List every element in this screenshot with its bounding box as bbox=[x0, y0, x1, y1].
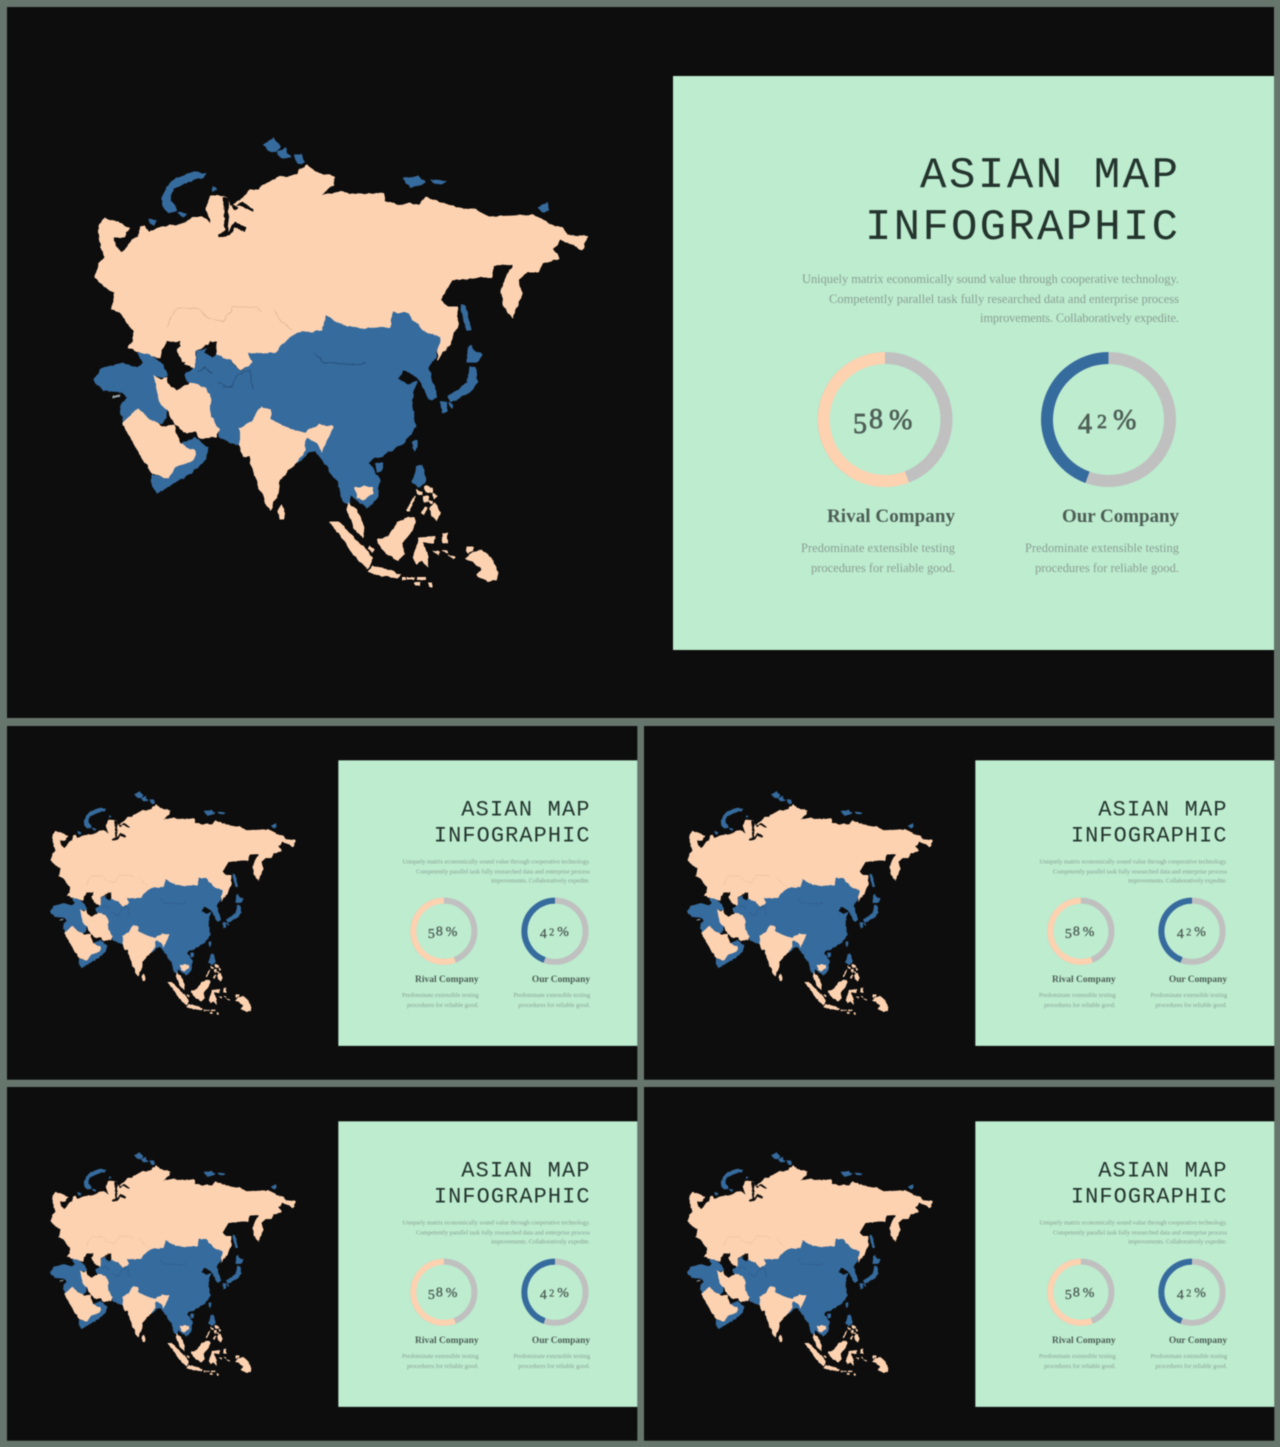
donut: rival 58% bbox=[824, 358, 946, 481]
slide: main large bbox=[7, 7, 1274, 718]
title: ASIAN MAP bbox=[1098, 798, 1227, 823]
slide: bottom right bbox=[644, 1087, 1274, 1441]
our value: 4 bbox=[1078, 409, 1092, 440]
map of Asia bbox=[51, 1153, 296, 1375]
rival caption: procedures for reliable good. bbox=[407, 1363, 479, 1370]
our caption: Predominate extensible testing bbox=[1150, 1353, 1227, 1360]
donut: our 42% bbox=[524, 1262, 586, 1323]
our value: % bbox=[1194, 1286, 1206, 1301]
our value: 2 bbox=[1097, 411, 1107, 433]
our caption: procedures for reliable good. bbox=[518, 1002, 591, 1009]
rival value: % bbox=[1083, 925, 1095, 940]
rival value: 5 bbox=[428, 927, 435, 942]
description bbox=[1040, 1219, 1228, 1246]
rival value: 5 bbox=[428, 1288, 435, 1303]
rival caption bbox=[402, 1353, 479, 1370]
panel: info bbox=[673, 76, 1274, 650]
description: Competently parallel task fully researched data and enterprise process bbox=[829, 292, 1179, 306]
panel: info bbox=[338, 1121, 637, 1407]
rival value: 8 bbox=[1073, 1285, 1080, 1300]
description: improvements. Collaboratively expedite. bbox=[1128, 1239, 1228, 1246]
title bbox=[434, 798, 590, 848]
rival caption: Predominate extensible testing bbox=[1039, 992, 1116, 999]
rival value: 8 bbox=[436, 1285, 443, 1300]
description: Uniquely matrix economically sound value through cooperative technology. bbox=[1040, 858, 1228, 865]
map of Asia bbox=[51, 792, 296, 1014]
slide background bbox=[7, 7, 1274, 718]
our heading: Our Company bbox=[1169, 1336, 1227, 1346]
our heading: Our Company bbox=[532, 1336, 590, 1346]
rival value: % bbox=[1083, 1286, 1095, 1301]
description: Competently parallel task fully researched data and enterprise process bbox=[416, 1229, 591, 1236]
our caption bbox=[513, 1353, 591, 1370]
title: INFOGRAPHIC bbox=[434, 823, 590, 848]
description: improvements. Collaboratively expedite. bbox=[491, 1239, 591, 1246]
title: ASIAN MAP bbox=[461, 798, 590, 823]
rival caption bbox=[801, 541, 956, 575]
donut: rival 58% bbox=[1050, 901, 1111, 962]
rival value: 8 bbox=[1073, 924, 1080, 939]
rival heading: Rival Company bbox=[1052, 975, 1116, 985]
donut: rival 58% bbox=[413, 901, 474, 962]
our value: % bbox=[557, 1286, 569, 1301]
our value: % bbox=[557, 925, 569, 940]
map of Asia bbox=[688, 1153, 933, 1375]
title: INFOGRAPHIC bbox=[1071, 823, 1227, 848]
our caption: Predominate extensible testing bbox=[1025, 541, 1180, 555]
donut: our 42% bbox=[1047, 358, 1170, 481]
slide background bbox=[7, 1087, 637, 1441]
rival value: 5 bbox=[1065, 1288, 1072, 1303]
title: ASIAN MAP bbox=[1098, 1159, 1227, 1184]
description: Uniquely matrix economically sound value through cooperative technology. bbox=[403, 858, 591, 865]
rival value: 8 bbox=[869, 404, 883, 435]
rival caption: Predominate extensible testing bbox=[402, 992, 479, 999]
rival value: % bbox=[446, 925, 458, 940]
rival value: 8 bbox=[436, 924, 443, 939]
our caption bbox=[1150, 992, 1228, 1009]
description: Competently parallel task fully researched data and enterprise process bbox=[1053, 868, 1228, 875]
slide background bbox=[644, 726, 1274, 1080]
our caption: Predominate extensible testing bbox=[513, 992, 590, 999]
description: Uniquely matrix economically sound value through cooperative technology. bbox=[802, 272, 1179, 286]
our value: % bbox=[1113, 405, 1136, 436]
our value: 4 bbox=[540, 927, 547, 942]
description bbox=[403, 858, 591, 885]
title: ASIAN MAP bbox=[461, 1159, 590, 1184]
our caption: procedures for reliable good. bbox=[1155, 1002, 1228, 1009]
panel: info bbox=[975, 760, 1274, 1046]
rival heading: Rival Company bbox=[827, 506, 956, 527]
our heading: Our Company bbox=[1169, 975, 1227, 985]
title: ASIAN MAP bbox=[920, 151, 1178, 201]
our value: 2 bbox=[549, 1288, 554, 1299]
our value: 2 bbox=[1186, 1288, 1191, 1299]
our heading: Our Company bbox=[532, 975, 590, 985]
rival caption bbox=[1039, 1353, 1116, 1370]
slide background bbox=[7, 726, 637, 1080]
description: Uniquely matrix economically sound value through cooperative technology. bbox=[1040, 1219, 1228, 1226]
rival caption: procedures for reliable good. bbox=[1044, 1363, 1116, 1370]
slide: top left bbox=[7, 726, 637, 1080]
description: Uniquely matrix economically sound value through cooperative technology. bbox=[403, 1219, 591, 1226]
panel: info bbox=[338, 760, 637, 1046]
description: improvements. Collaboratively expedite. bbox=[1128, 878, 1228, 885]
rival caption: procedures for reliable good. bbox=[1044, 1002, 1116, 1009]
our value: 4 bbox=[1177, 927, 1184, 942]
rival value: 5 bbox=[853, 409, 867, 440]
title bbox=[434, 1159, 590, 1209]
description: Competently parallel task fully researched data and enterprise process bbox=[1053, 1229, 1228, 1236]
rival caption: procedures for reliable good. bbox=[407, 1002, 479, 1009]
rival value: % bbox=[889, 405, 912, 436]
our value: 2 bbox=[1186, 927, 1191, 938]
rival caption: Predominate extensible testing bbox=[1039, 1353, 1116, 1360]
rival caption: procedures for reliable good. bbox=[811, 561, 955, 575]
our caption bbox=[1025, 541, 1180, 575]
our caption: procedures for reliable good. bbox=[1155, 1363, 1228, 1370]
our value: 2 bbox=[549, 927, 554, 938]
title: INFOGRAPHIC bbox=[1071, 1184, 1227, 1209]
title bbox=[1071, 798, 1227, 848]
rival caption bbox=[402, 992, 479, 1009]
our caption bbox=[513, 992, 591, 1009]
rival heading: Rival Company bbox=[415, 975, 479, 985]
our value: 4 bbox=[1177, 1288, 1184, 1303]
our value: % bbox=[1194, 925, 1206, 940]
rival value: 5 bbox=[1065, 927, 1072, 942]
our heading: Our Company bbox=[1062, 506, 1180, 527]
donut: our 42% bbox=[524, 901, 586, 962]
description: Competently parallel task fully researched data and enterprise process bbox=[416, 868, 591, 875]
rival heading: Rival Company bbox=[1052, 1336, 1116, 1346]
our caption: Predominate extensible testing bbox=[1150, 992, 1227, 999]
donut: our 42% bbox=[1161, 1262, 1223, 1323]
our caption: procedures for reliable good. bbox=[518, 1363, 591, 1370]
donut: our 42% bbox=[1161, 901, 1223, 962]
title bbox=[865, 151, 1178, 253]
description: improvements. Collaboratively expedite. bbox=[491, 878, 591, 885]
description bbox=[1040, 858, 1228, 885]
description bbox=[802, 272, 1179, 325]
title bbox=[1071, 1159, 1227, 1209]
donut: rival 58% bbox=[1050, 1262, 1111, 1323]
description: improvements. Collaboratively expedite. bbox=[980, 311, 1179, 325]
slide background bbox=[644, 1087, 1274, 1441]
rival value: % bbox=[446, 1286, 458, 1301]
our caption: Predominate extensible testing bbox=[513, 1353, 590, 1360]
rival caption: Predominate extensible testing bbox=[402, 1353, 479, 1360]
title: INFOGRAPHIC bbox=[865, 203, 1178, 253]
map of Asia bbox=[688, 792, 933, 1014]
rival caption: Predominate extensible testing bbox=[801, 541, 956, 555]
description bbox=[403, 1219, 591, 1246]
our value: 4 bbox=[540, 1288, 547, 1303]
panel: info bbox=[975, 1121, 1274, 1407]
our caption bbox=[1150, 1353, 1228, 1370]
title: INFOGRAPHIC bbox=[434, 1184, 590, 1209]
slide: top right bbox=[644, 726, 1274, 1080]
rival caption bbox=[1039, 992, 1116, 1009]
our caption: procedures for reliable good. bbox=[1035, 561, 1179, 575]
slide: bottom left bbox=[7, 1087, 637, 1441]
map of Asia bbox=[95, 139, 587, 586]
rival heading: Rival Company bbox=[415, 1336, 479, 1346]
donut: rival 58% bbox=[413, 1262, 474, 1323]
